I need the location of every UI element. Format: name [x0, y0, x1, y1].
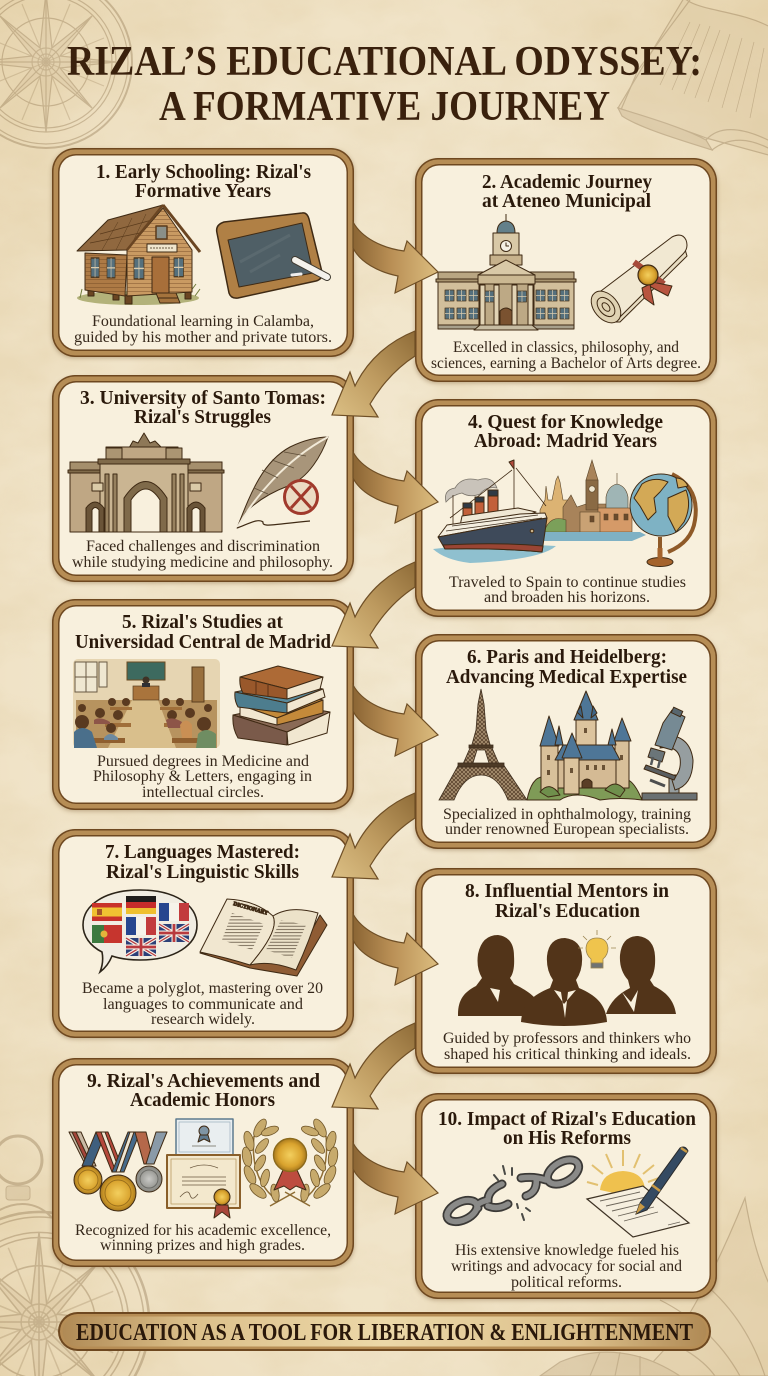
- icon: lecture hall: [73, 659, 220, 748]
- heading 8: [465, 880, 670, 922]
- panel: 10 Impact on Reforms: [415, 1093, 717, 1300]
- icon: laurel wreath with medal: [241, 1117, 339, 1206]
- heading 10: 10. Impact of Rizal's Education: [438, 1108, 697, 1130]
- text block 3: [72, 538, 333, 571]
- icon: open dictionary: [200, 899, 327, 976]
- icon: certificates: [167, 1119, 240, 1218]
- arrow: 8 to 9: [332, 1023, 415, 1109]
- icon: three mentor silhouettes: [458, 935, 676, 1026]
- panel: 8 Influential Mentors: [415, 868, 717, 1075]
- heading 3: [80, 387, 326, 428]
- heading 2: [482, 171, 653, 212]
- text block 9: [75, 1222, 331, 1254]
- heading 6: 6. Paris and Heidelberg:: [467, 646, 667, 668]
- arrow: 6 to 7: [332, 793, 415, 879]
- icon: ocean liner: [433, 460, 646, 563]
- panel: 7 Languages Mastered: [52, 829, 354, 1039]
- arrow: 7 to 8: [353, 914, 438, 985]
- text block 7: [82, 980, 323, 1028]
- text block 1: [74, 313, 332, 346]
- heading 7: Rizal's Linguistic Skills: [106, 861, 299, 883]
- text block 5: intellectual circles.: [142, 784, 264, 801]
- icon: microscope: [642, 707, 697, 800]
- banner: closing statement: [58, 1312, 711, 1351]
- decoration: open book bottom right: [540, 1198, 768, 1376]
- icon: Eiffel Tower: [439, 689, 527, 800]
- heading 4: Abroad: Madrid Years: [474, 430, 657, 452]
- text block 8: [443, 1030, 691, 1063]
- heading 1: [96, 161, 311, 202]
- text block 2: [431, 339, 701, 372]
- text block 7: research widely.: [151, 1011, 255, 1028]
- heading 5: 5. Rizal's Studies at: [122, 611, 283, 633]
- icon: diploma scroll: [585, 235, 687, 329]
- icon: Ateneo building: [436, 214, 576, 330]
- heading 1: 1. Early Schooling: Rizal's: [96, 161, 311, 183]
- icon: city skyline: [540, 460, 632, 532]
- text block 4: Traveled to Spain to continue studies: [449, 574, 686, 591]
- icon: Heidelberg castle: [527, 691, 642, 800]
- heading 7: 7. Languages Mastered:: [105, 841, 300, 863]
- icon: three medals: [69, 1132, 167, 1211]
- icon: wooden schoolhouse: [77, 205, 200, 305]
- text block 3: while studying medicine and philosophy.: [72, 554, 333, 571]
- heading 9: 9. Rizal's Achievements and: [87, 1070, 321, 1092]
- heading 3: Rizal's Struggles: [134, 406, 271, 428]
- panel: 1 Early Schooling: [52, 148, 354, 358]
- arrow: 4 to 5: [332, 562, 415, 648]
- title: [67, 39, 702, 130]
- heading 6: Advancing Medical Expertise: [446, 666, 687, 688]
- text block 9: Recognized for his academic excellence,: [75, 1222, 331, 1239]
- heading 8: Rizal's Education: [495, 900, 641, 922]
- icon: quill and X mark: [237, 437, 328, 528]
- panel: 3 University of Santo Tomas: [52, 375, 354, 583]
- text block 4: and broaden his horizons.: [484, 589, 650, 606]
- text block 7: languages to communicate and: [103, 996, 303, 1013]
- heading 5: Universidad Central de Madrid: [75, 631, 332, 653]
- text block 5: [93, 753, 312, 801]
- heading 4: [468, 411, 663, 452]
- icon: open dictionary: DICTIONARY: [232, 901, 269, 917]
- decoration: pocket watch and compass bottom left: [0, 1136, 149, 1376]
- text block 10: political reforms.: [511, 1274, 622, 1291]
- panel: 6 Paris and Heidelberg: [415, 634, 717, 850]
- decoration: compass top left: [0, 0, 132, 148]
- icon: university arch: [68, 433, 224, 532]
- text block 10: His extensive knowledge fueled his: [455, 1242, 679, 1259]
- icon: speech bubble with flags: [83, 890, 197, 972]
- heading 9: [87, 1070, 321, 1111]
- heading 7: [105, 841, 300, 883]
- text block 8: shaped his critical thinking and ideals.: [444, 1046, 691, 1063]
- heading 6: [446, 646, 687, 688]
- text block 6: under renowned European specialists.: [445, 821, 689, 838]
- icon: stack of books: [233, 666, 330, 745]
- text block 6: Specialized in ophthalmology, training: [443, 806, 691, 823]
- text block 9: winning prizes and high grades.: [100, 1237, 305, 1254]
- heading 10: on His Reforms: [503, 1127, 631, 1149]
- heading 3: 3. University of Santo Tomas:: [80, 387, 326, 409]
- heading 2: 2. Academic Journey: [482, 171, 653, 193]
- text block 5: Philosophy & Letters, engaging in: [93, 768, 312, 785]
- text block 2: sciences, earning a Bachelor of Arts degree.: [431, 355, 701, 372]
- heading 8: 8. Influential Mentors in: [465, 880, 670, 902]
- text block 7: Became a polyglot, mastering over 20: [82, 980, 323, 997]
- heading 5: [75, 611, 332, 653]
- decoration: open book top right: [618, 0, 768, 156]
- arrow: 3 to 4: [353, 452, 438, 523]
- text block 8: Guided by professors and thinkers who: [443, 1030, 691, 1047]
- panel: 2 Ateneo Municipal: [415, 158, 717, 383]
- text block 10: [451, 1242, 682, 1291]
- arrow: 1 to 2: [353, 222, 438, 293]
- arrow: 5 to 6: [353, 685, 438, 756]
- text block 1: guided by his mother and private tutors.: [74, 329, 332, 346]
- heading 9: Academic Honors: [130, 1089, 275, 1111]
- panel: 5 Universidad Central de Madrid: [52, 599, 354, 811]
- heading 2: at Ateneo Municipal: [482, 190, 651, 212]
- icon: globe: [630, 474, 696, 566]
- panel: 9 Achievements: [52, 1058, 354, 1268]
- title: A FORMATIVE JOURNEY: [159, 84, 610, 130]
- text block 3: Faced challenges and discrimination: [86, 538, 320, 555]
- heading 10: [438, 1108, 697, 1149]
- text block 1: Foundational learning in Calamba,: [92, 313, 314, 330]
- text block 6: [443, 806, 691, 838]
- arrow: 2 to 3: [332, 331, 415, 417]
- title: RIZAL’S EDUCATIONAL ODYSSEY:: [67, 39, 702, 85]
- text block 5: Pursued degrees in Medicine and: [97, 753, 309, 770]
- heading 1: Formative Years: [135, 180, 271, 202]
- icon: light bulb: [578, 930, 616, 968]
- text block 10: writings and advocacy for social and: [451, 1258, 682, 1275]
- heading 4: 4. Quest for Knowledge: [468, 411, 663, 433]
- text block 4: [449, 574, 686, 606]
- text block 2: Excelled in classics, philosophy, and: [453, 339, 679, 356]
- icon: sunrise, paper and pen: [587, 1147, 689, 1237]
- icon: broken chain: [444, 1155, 583, 1226]
- arrow: 9 to 10: [353, 1143, 438, 1214]
- icon: chalkboard: [217, 213, 327, 298]
- panel: 4 Madrid Years: [415, 399, 717, 618]
